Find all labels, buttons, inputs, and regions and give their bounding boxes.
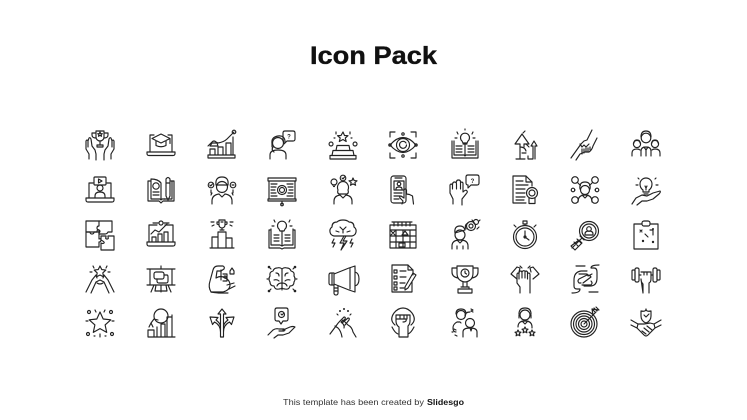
icon: interlocking hands: [572, 265, 599, 293]
icon: two people: [452, 309, 477, 337]
footer credit: This template has been created by: [283, 397, 425, 407]
icon: stopwatch: [514, 221, 536, 248]
icon: magnifier key: [571, 222, 598, 250]
icon: focus eye target: [389, 132, 417, 158]
icon: presentation stand with chat: [147, 266, 175, 292]
icon: certificate document: [513, 176, 538, 204]
icon: person with stars: [515, 308, 535, 336]
icon: hands holding trophy: [86, 131, 114, 160]
icon: open book with idea: [269, 220, 295, 249]
icon: three-way arrows: [210, 309, 234, 337]
icon: person with network nodes: [571, 177, 599, 203]
icon: raised fist: [392, 308, 414, 337]
icon: raised hand with question bubble: ?: [471, 179, 475, 185]
icon: star with confetti: [86, 310, 114, 337]
icon: laptop with graduation cap: [147, 134, 175, 156]
icon: phone with tapping hand: [391, 176, 414, 204]
icon: chart with boulder: [148, 309, 175, 337]
icon: checklist with pencil: [392, 265, 416, 292]
icon: clapping hands: [330, 308, 356, 337]
icon: megaphone: [329, 266, 359, 295]
icon grid: [86, 129, 661, 338]
icon: three united hands: [511, 266, 539, 293]
icon: team of three: [632, 131, 660, 156]
icon: laptop with video and person: [86, 177, 114, 202]
icon: calendar plan: [390, 222, 416, 248]
icon: raised hand with question bubble: [450, 175, 479, 205]
icon: climbing hands: [571, 130, 597, 160]
icon: notebook with pencil: [148, 178, 174, 203]
icon: dumbbell and fist: [632, 268, 660, 293]
icon: open book with light bulb: [452, 129, 478, 158]
icon: clipboard game plan: [634, 221, 658, 249]
icon: brain: [267, 266, 297, 292]
icon: strong arm: [209, 266, 235, 293]
icon: trophy with medal: [452, 266, 478, 293]
icon: growth chart: [208, 130, 236, 158]
icon: stepped podium with star: [329, 132, 357, 159]
icon: person with headset and question bubble: [270, 131, 295, 159]
icon: woman with ideas: [331, 175, 357, 204]
icon: handshake with shield: [631, 309, 661, 336]
icon: star between two hands: [86, 266, 114, 293]
icon: hand holding chat bubble: [268, 308, 295, 338]
icon: person with headset and question bubble: ?: [287, 134, 291, 140]
icon: puzzle pieces: [86, 221, 114, 250]
icon: storm cloud with lightning: [330, 220, 356, 250]
icon: person with gears: [452, 220, 480, 249]
icon: laptop with chart: [147, 221, 175, 246]
icon: hand holding light bulb: [632, 178, 660, 205]
icon: presentation board: [268, 178, 296, 206]
title: Icon Pack: [310, 42, 437, 70]
icon: upward arrows: [515, 131, 537, 159]
icon: winners podium with trophy: [210, 220, 234, 248]
icon: person with thought icons: [208, 177, 236, 204]
footer credit: Slidesgo: [427, 397, 464, 407]
icon: target with arrow: [571, 307, 599, 337]
